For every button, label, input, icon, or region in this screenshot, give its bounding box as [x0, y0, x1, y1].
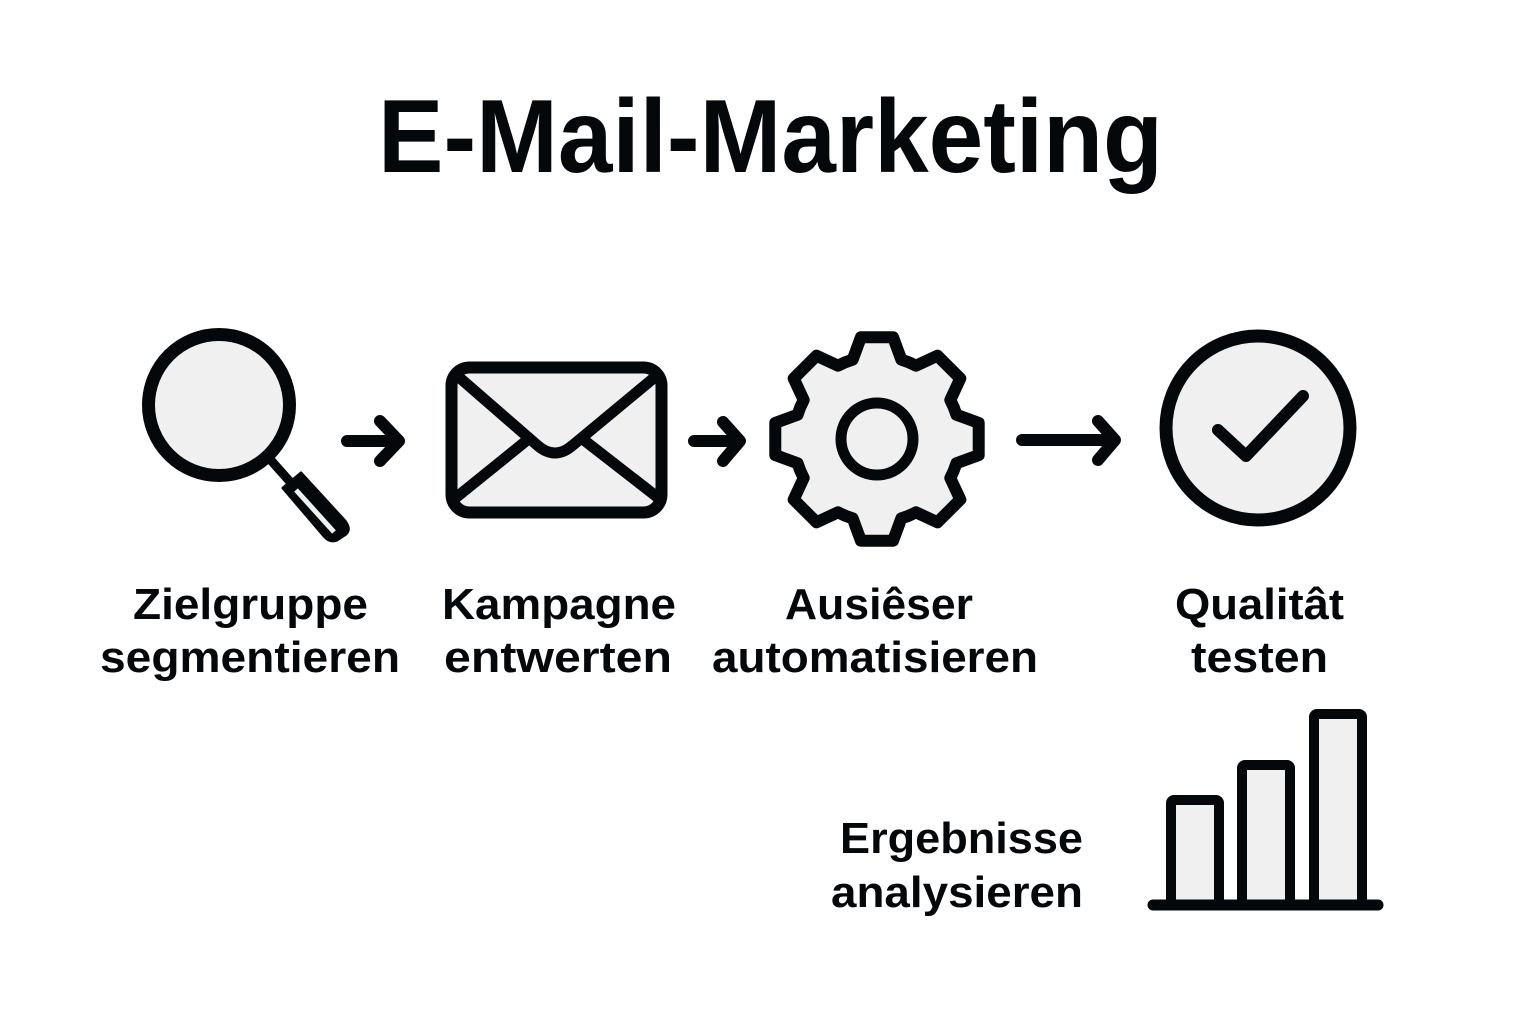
label: Zielgruppe segmentieren: Zielgruppe — [133, 580, 368, 629]
label: Zielgruppe segmentieren: segmentieren — [100, 633, 400, 682]
label: Ergebnisse analysieren: Ergebnisse — [840, 814, 1083, 863]
label: Ergebnisse analysieren — [831, 814, 1083, 917]
label: Qualität testen — [1175, 580, 1344, 682]
label: Qualität testen: testen — [1191, 633, 1328, 682]
icon: check circle — [1166, 336, 1350, 520]
arrow: step 1 to 2 — [347, 421, 399, 461]
arrow: step 2 to 3 — [694, 422, 740, 461]
label: Ergebnisse analysieren: analysieren — [831, 868, 1083, 917]
label: Qualität testen: Qualitât — [1175, 580, 1344, 629]
icon: gear — [775, 337, 979, 541]
arrow: step 3 to 4 — [1022, 421, 1115, 460]
label: Zielgruppe segmentieren — [100, 580, 400, 682]
label: Kampagne entwerfen: Kampagne — [442, 580, 676, 629]
label: Auslöser automatisieren — [712, 580, 1038, 682]
icon: bar chart — [1153, 714, 1378, 905]
title: E-Mail-Marketing — [378, 79, 1163, 195]
icon: envelope — [452, 368, 662, 512]
label: Kampagne entwerfen: entwerten — [444, 633, 672, 682]
label: Auslöser automatisieren: automatisieren — [712, 633, 1038, 682]
label: Auslöser automatisieren: Ausiêser — [785, 580, 973, 629]
label: Kampagne entwerfen — [442, 580, 676, 682]
icon: magnifying glass — [148, 334, 348, 541]
